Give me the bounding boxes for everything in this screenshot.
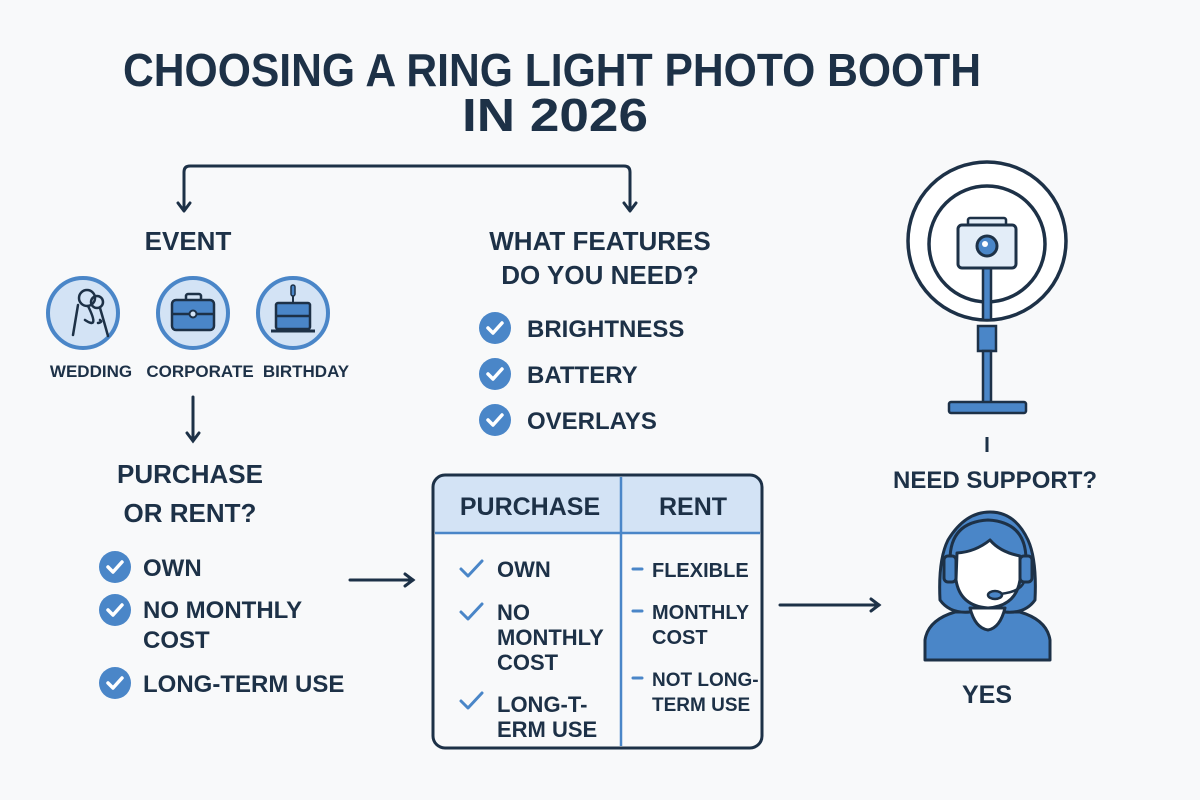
icon: corporate: [158, 278, 228, 348]
table: purchase vs rent: COST: [652, 627, 708, 649]
list: features: OVERLAYS: [527, 408, 657, 435]
heading: features: [489, 226, 711, 290]
table: purchase vs rent: NO: [497, 600, 530, 625]
title: [123, 44, 981, 141]
event labels: [50, 362, 350, 381]
arrow: to support: [780, 599, 879, 611]
arrow: to table: [350, 574, 413, 586]
list: features: BRIGHTNESS: [527, 316, 684, 343]
icon: support agent: [925, 512, 1050, 660]
list: features: [479, 312, 684, 436]
heading: purchase or rent: [117, 459, 263, 528]
icon: wedding: [48, 278, 118, 348]
list: purchase benefits: LONG-TERM USE: [143, 671, 344, 698]
heading: event: EVENT: [145, 226, 231, 256]
heading: need support: NEED SUPPORT?: [893, 467, 1097, 494]
event labels: CORPORATE: [146, 362, 254, 381]
title: CHOOSING A RING LIGHT PHOTO BOOTH: [123, 44, 981, 96]
table: purchase vs rent: [433, 475, 762, 748]
icon: ring light: [908, 162, 1066, 413]
heading: features: DO YOU NEED?: [501, 260, 699, 290]
list: purchase benefits: [99, 551, 344, 699]
label: yes: YES: [962, 681, 1012, 709]
table: purchase vs rent: OWN: [497, 557, 551, 582]
arrow: down to purchase: [187, 397, 199, 441]
event labels: BIRTHDAY: [263, 362, 350, 381]
arrow: bracket split: [178, 166, 636, 211]
heading: purchase or rent: PURCHASE: [117, 459, 263, 489]
event labels: WEDDING: [50, 362, 132, 381]
table: purchase vs rent: FLEXIBLE: [652, 560, 749, 582]
table: purchase vs rent: RENT: [659, 493, 727, 521]
table: purchase vs rent: TERM USE: [652, 695, 750, 716]
icon: birthday: [258, 278, 328, 348]
list: purchase benefits: OWN: [143, 555, 202, 582]
table: purchase vs rent: MONTHLY: [497, 625, 604, 650]
list: features: BATTERY: [527, 362, 638, 389]
list: purchase benefits: NO MONTHLY: [143, 597, 302, 624]
table: purchase vs rent: ERM USE: [497, 717, 597, 742]
table: purchase vs rent: MONTHLY: [652, 602, 750, 624]
table: purchase vs rent: LONG-T-: [497, 692, 587, 717]
table: purchase vs rent: NOT LONG-: [652, 670, 759, 691]
connector tick: [986, 437, 988, 452]
title: IN 2026: [462, 89, 648, 141]
table: purchase vs rent: PURCHASE: [460, 493, 600, 521]
heading: features: WHAT FEATURES: [489, 226, 711, 256]
heading: purchase or rent: OR RENT?: [124, 498, 256, 528]
list: purchase benefits: COST: [143, 627, 210, 654]
table: purchase vs rent: COST: [497, 650, 559, 675]
